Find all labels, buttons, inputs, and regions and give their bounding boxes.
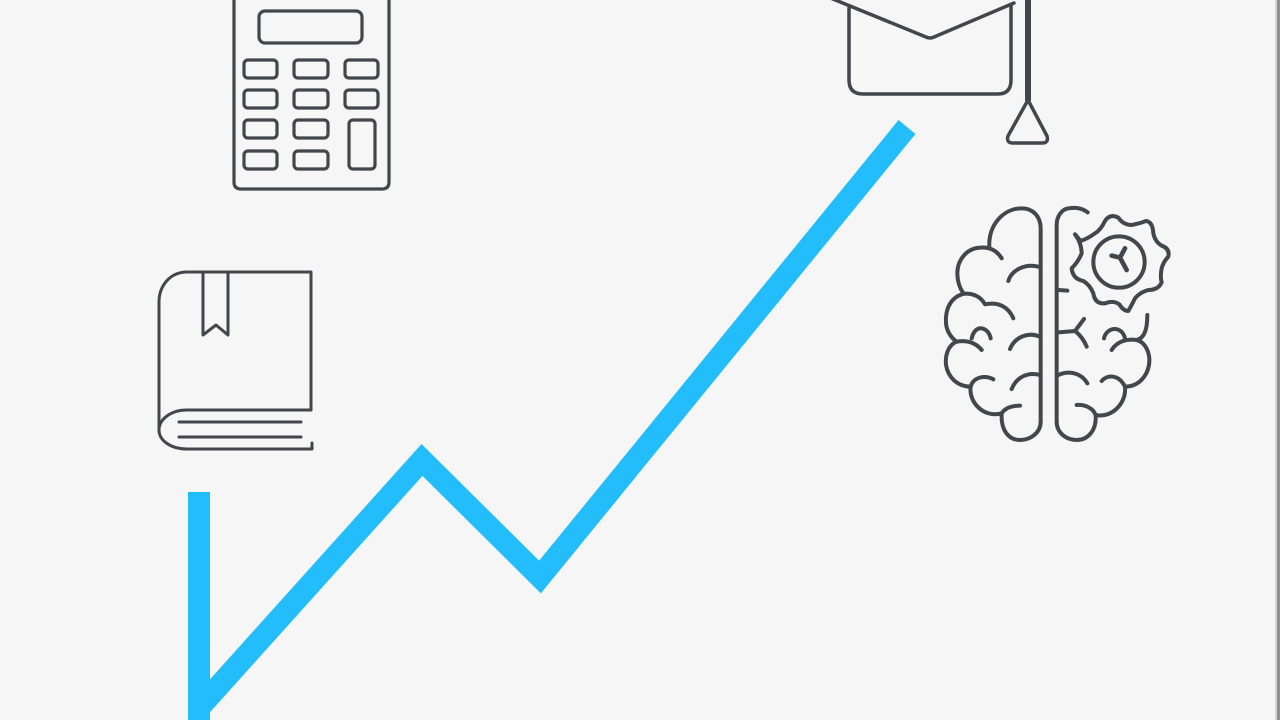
brain: left hemisphere: [946, 208, 1041, 440]
gear: [1072, 216, 1169, 311]
icon: brain with gear: [946, 208, 1149, 440]
icon: graduation cap: [828, 0, 1047, 143]
icon: calculator: [234, 0, 389, 189]
brain: right hemisphere: [1057, 208, 1149, 440]
growth line: [199, 127, 907, 720]
icon: book: [159, 272, 312, 449]
